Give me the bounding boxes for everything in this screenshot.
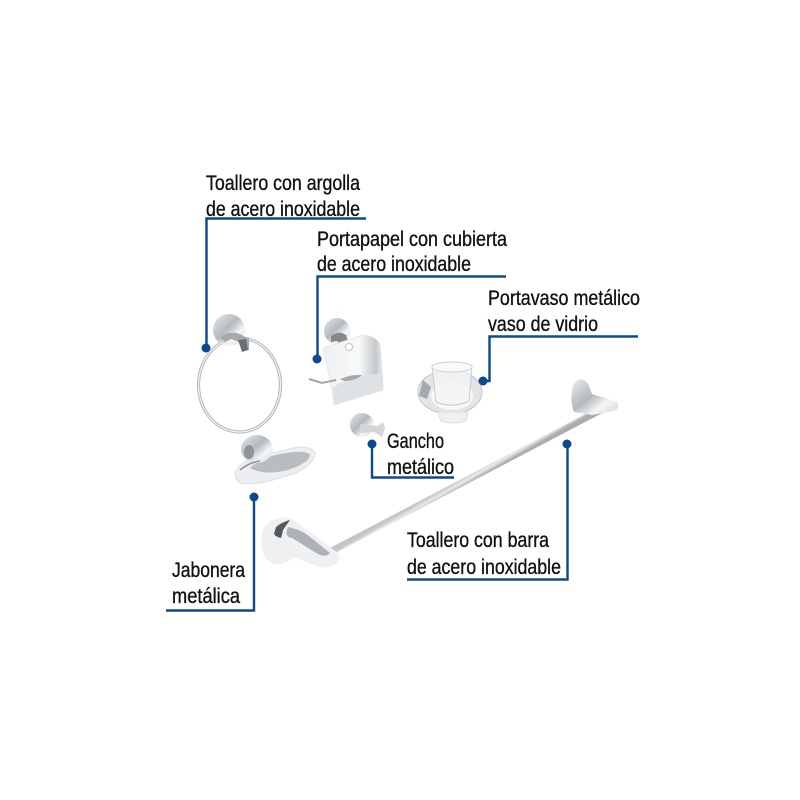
label: towel bar: Toallero con barra (407, 529, 549, 552)
label: toilet paper holder: Portapapel con cubierta (317, 228, 507, 251)
label: towel bar: de acero inoxidable (407, 556, 561, 579)
product: glass holder (418, 362, 482, 423)
label: towel bar (407, 440, 572, 580)
label: hook: metálico (387, 456, 454, 479)
label: towel ring: Toallero con argolla (206, 172, 360, 195)
label: glass holder: Portavaso metálico (488, 287, 640, 310)
label: hook: Gancho (387, 430, 444, 453)
product: towel ring (198, 314, 280, 432)
product: hook (350, 413, 385, 437)
label: glass holder: vaso de vidrio (488, 313, 598, 336)
label: toilet paper holder: de acero inoxidable (317, 253, 471, 276)
product: toilet paper holder (309, 318, 383, 405)
label: towel ring (202, 172, 366, 352)
label: toilet paper holder (312, 228, 507, 364)
label: hook (368, 430, 454, 479)
label: glass holder (478, 287, 640, 386)
product: towel bar (261, 379, 618, 568)
label: soap dish: Jabonera (172, 559, 245, 582)
label: towel ring: de acero inoxidable (206, 198, 360, 221)
label: soap dish: metálica (172, 585, 240, 608)
label: soap dish (166, 492, 258, 610)
product: soap dish (235, 435, 315, 484)
